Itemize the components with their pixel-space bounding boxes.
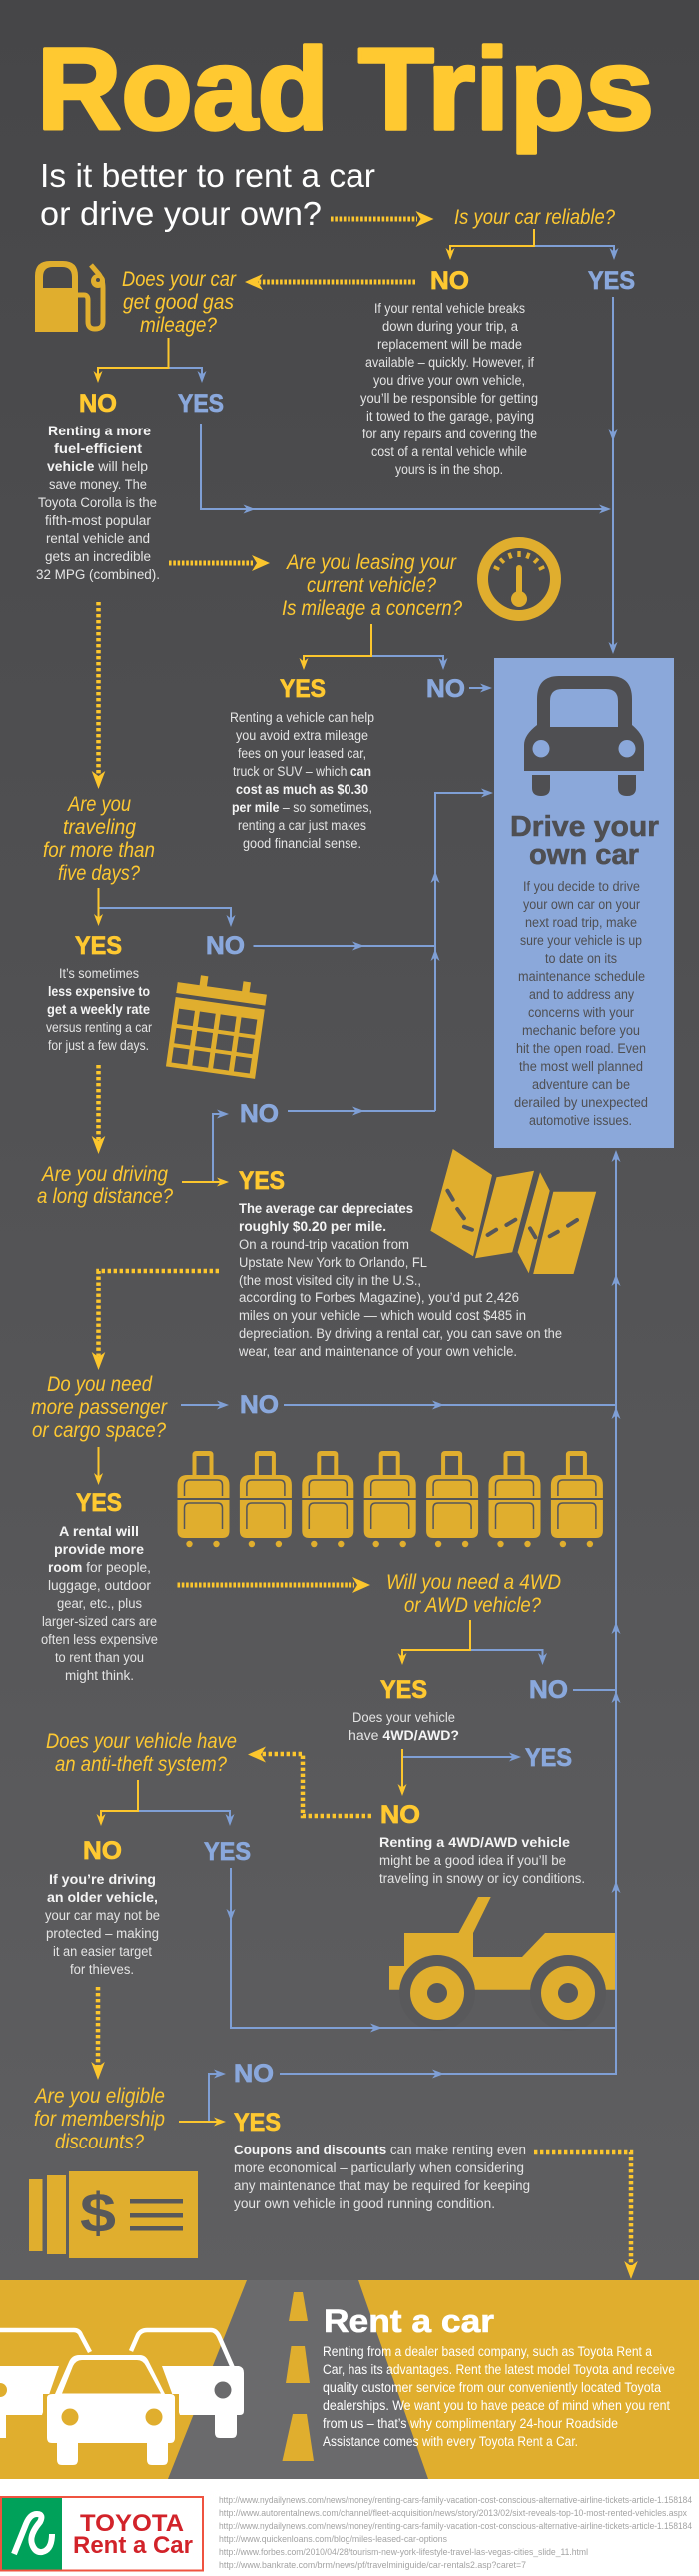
panel text [514,879,648,1128]
panel heading [510,811,659,871]
logo: toyota rent a car: Rent a Car [73,2532,193,2559]
icon: folded map [430,1149,596,1274]
branch: reliable yes / no [445,229,619,260]
text: does your vehicle have 4wd: have 4WD/AWD? [349,1728,459,1743]
label: no: NO [240,1100,279,1128]
text: renting 4wd [379,1835,585,1886]
text: rent a car: Renting from a dealer based company, such as Toyota Rent a [323,2344,652,2359]
title: Trips [358,24,654,154]
icon: gas pump [35,261,105,332]
logo: toyota rent a car [1,2497,203,2571]
panel text: your own car on your [523,897,640,912]
label: no: NO [380,1801,420,1829]
text: more room: might think. [65,1668,134,1683]
logo: toyota rent a car: TOYOTA [80,2510,184,2537]
icon: dollar bill: $ [80,2181,116,2244]
subtitle: Is it better to rent a car [40,157,375,194]
text: older vehicle: an older vehicle, [47,1890,158,1905]
text: rent a car: Assistance comes with every Toyota Rent a Car. [323,2434,578,2449]
arrow: to 4wd question [178,1577,370,1593]
panel: rent a car [0,2280,699,2479]
branch: five days [94,888,236,927]
text: coupons [234,2143,530,2211]
label: yes: YES [525,1744,572,1772]
question: good gas mileage [122,268,237,337]
text: depreciation: roughly $0.20 per mile. [239,1219,386,1234]
text: weekly rate: It’s sometimes [59,966,139,981]
arrow: dotted to rent a car [534,2152,638,2279]
text: depreciation: On a round-trip vacation from [239,1237,409,1252]
heading: rent a car: Rent a car [324,2303,494,2339]
question: five days [43,793,155,885]
text: rental breakdown: you drive your own vehicle, [373,373,525,388]
label: no: NO [529,1676,568,1704]
label: no: NO [426,675,465,703]
text: older vehicle: If you’re driving [49,1872,156,1887]
question: is your car reliable: Is your car reliable? [454,206,615,229]
panel text: next road trip, make [525,915,637,930]
question: good gas mileage: get good gas [123,291,234,314]
question: anti-theft: an anti-theft system? [55,1753,227,1776]
branch: leasing [300,624,447,670]
text: more room: gear, etc., plus [57,1596,142,1611]
panel text: automotive issues. [529,1113,632,1128]
label: no: NO [83,1837,122,1865]
text: depreciation: Upstate New York to Orlando, FL [239,1255,427,1270]
text: rental breakdown: cost of a rental vehicle while [371,444,527,459]
question: long distance: Are you driving [40,1163,168,1186]
text: older vehicle: protected – making [46,1926,159,1941]
text: mileage fees [230,710,374,851]
text: rental breakdown: available – quickly. However, if [365,355,534,370]
text: fuel efficient vehicle [36,424,160,582]
text: renting 4wd: might be a good idea if you’ll be [379,1853,566,1868]
text: weekly rate: less expensive to [48,984,150,999]
label: yes: YES [380,1676,427,1704]
question: membership: discounts? [55,2131,144,2153]
question: good gas mileage: Does your car [122,268,237,291]
label: no: NO [79,390,117,418]
text: coupons: more economical – particularly when considering [234,2160,524,2175]
panel text: and to address any [529,987,634,1002]
arrow: no to main line [280,2070,617,2078]
text: fuel efficient vehicle: fifth-most popular [45,513,152,528]
text: mileage fees: Renting a vehicle can help [230,710,374,725]
panel: drive your own car [494,658,674,1148]
text: weekly rate: versus renting a car [46,1020,152,1035]
question: good gas mileage: mileage? [140,314,217,337]
arrow: no to main line [284,1400,616,1410]
text: rental breakdown: If your rental vehicle breaks [374,301,525,316]
subtitle [40,157,375,232]
arrow: passenger yes [94,1447,103,1485]
text: renting 4wd: Renting a 4WD/AWD vehicle [379,1835,570,1850]
text: rental breakdown: you’ll be responsible for getting [360,391,538,406]
icon: three cars [0,2330,244,2465]
icon: jeep [389,1897,615,2031]
panel text: mechanic before you [522,1023,640,1038]
text: fuel efficient vehicle: vehicle will help [47,459,148,474]
arrow: no to connector [254,941,435,951]
text: does your vehicle have 4wd [349,1710,459,1743]
branch: membership [179,2070,226,2126]
text: older vehicle: your car may not be [45,1908,160,1923]
question: membership: Are you eligible [33,2085,165,2108]
label: yes: YES [178,390,224,418]
panel text: to date on its [545,951,617,966]
question: anti-theft: Does your vehicle have [46,1730,237,1753]
sources list: http://www.quickenloans.com/blog/miles-leased-car-options [219,2534,447,2544]
label: no: NO [206,932,245,960]
question: long distance [37,1163,173,1208]
branch: gas mileage [94,338,206,383]
arrow: no to gas question [245,274,415,290]
text: more room [41,1524,158,1683]
label: no: NO [240,1391,279,1419]
text: mileage fees: renting a car just makes [238,818,366,833]
question: passenger space: more passenger [31,1396,168,1419]
text: rental breakdown: for any repairs and covering the [362,427,537,441]
text: renting 4wd: traveling in snowy or icy conditions. [379,1871,585,1886]
panel text: sure your vehicle is up [520,933,642,948]
text: weekly rate [46,966,152,1053]
text: depreciation: according to Forbes Magazine), you’d put 2,426 [239,1290,519,1305]
label: yes: YES [280,675,326,703]
label: no: NO [234,2060,274,2088]
label: yes: YES [239,1167,285,1195]
label: no: NO [430,267,469,295]
question: long distance: a long distance? [37,1185,173,1208]
text: depreciation: miles on your vehicle — which would cost $485 in [239,1308,526,1323]
question: leasing: Are you leasing your [285,551,457,574]
panel heading: Drive your [510,811,659,843]
panel text: maintenance schedule [518,969,645,984]
label: yes: YES [204,1838,251,1866]
question: passenger space: Do you need [47,1373,153,1396]
text: more room: often less expensive [41,1632,158,1647]
text: more room: A rental will [59,1524,139,1539]
text: mileage fees: truck or SUV – which can [233,764,371,779]
text: coupons: Coupons and discounts can make renting even [234,2143,526,2157]
question: anti-theft [46,1730,237,1776]
question: membership: for membership [34,2108,165,2131]
arrow: passenger no [181,1400,229,1410]
text: fuel efficient vehicle: rental vehicle and [46,531,150,546]
subtitle: or drive your own? [40,195,322,232]
question: five days: traveling [63,816,136,839]
arrow: subtitle to first question [331,211,433,227]
text: rental breakdown [360,301,538,477]
text: more room: larger-sized cars are [42,1614,157,1629]
question: 4wd: Will you need a 4WD [386,1571,561,1594]
text: mileage fees: per mile – so sometimes, [232,800,372,815]
question: leasing: current vehicle? [307,574,436,597]
title: Road [37,24,329,154]
arrow: gas yes to main line [201,424,611,513]
branch: anti-theft [96,1780,234,1826]
text: coupons: any maintenance that may be required for keeping [234,2178,530,2193]
icon: car front [524,676,644,796]
arrow: dotted to passenger question [92,1271,219,1370]
text: rent a car [323,2344,675,2449]
arrow: dotted to membership question [91,1987,105,2080]
panel text: derailed by unexpected [514,1095,648,1110]
text: mileage fees: fees on your leased car, [238,746,366,761]
text: fuel efficient vehicle: gets an incredible [45,549,151,564]
sources list: http://www.bankrate.com/brm/news/pf/travelminiguide/car-rentals2.asp?caret=7 [219,2560,526,2570]
text: mileage fees: you avoid extra mileage [236,728,368,743]
arrow: leasing no to panel [469,683,492,693]
question: passenger space [31,1373,168,1442]
text: depreciation: depreciation. By driving a rental car, you can save on the [239,1326,562,1341]
panel text: If you decide to drive [523,879,640,894]
text: rental breakdown: it towed to the garage, paying [366,409,534,424]
text: fuel efficient vehicle: Renting a more [48,424,151,438]
text: rent a car: quality customer service from our conveniently located Toyota [323,2380,662,2395]
text: rent a car: from us – that’s why complimentary 24-hour Roadside [323,2416,618,2431]
text: mileage fees: cost as much as $0.30 [236,782,368,797]
arrow: connector up into panel [431,789,493,1111]
text: mileage fees: good financial sense. [243,836,361,851]
text: depreciation: wear, tear and maintenance of your own vehicle. [238,1344,517,1359]
text: depreciation: (the most visited city in the U.S., [239,1273,421,1288]
text: weekly rate: for just a few days. [48,1038,149,1053]
arrow: no to main line [573,1689,616,1691]
question: 4wd: or AWD vehicle? [404,1594,541,1617]
text: more room: provide more [54,1542,144,1557]
text: weekly rate: get a weekly rate [47,1002,150,1017]
icon: row of suitcases [178,1451,603,1547]
text: fuel efficient vehicle: 32 MPG (combined). [36,567,160,582]
label: yes: YES [588,267,635,295]
text: fuel efficient vehicle: fuel-efficient [54,441,143,456]
question: leasing [282,551,462,620]
text: depreciation: The average car depreciates [239,1201,413,1216]
branch: has 4wd [397,1749,521,1796]
text: older vehicle: it an easier target [53,1944,152,1959]
label: yes: YES [75,932,122,960]
arrow: anti-theft yes to main line [226,1868,616,2032]
question: five days: for more than [43,839,155,862]
text: older vehicle [45,1872,160,1977]
text: rental breakdown: yours is in the shop. [395,462,503,477]
icon: gauge [483,543,555,615]
question: passenger space: or cargo space? [32,1419,166,1442]
text: does your vehicle have 4wd: Does your vehicle [352,1710,455,1725]
question: membership [33,2085,165,2153]
question: five days: five days? [58,862,140,885]
panel text: hit the open road. Even [516,1041,646,1056]
text: older vehicle: for thieves. [70,1962,134,1977]
panel text: concerns with your [528,1005,635,1020]
sources list [219,2495,692,2570]
question: leasing: Is mileage a concern? [282,597,462,620]
text: more room: room for people, [48,1560,151,1575]
question: 4wd [386,1571,561,1617]
text: depreciation [238,1201,562,1359]
text: fuel efficient vehicle: Toyota Corolla is the [38,495,157,510]
arrow: yes down to drive your own car [609,297,617,654]
arrow: no to anti-theft [248,1746,371,1816]
title [37,24,654,154]
road [168,2280,428,2479]
panel heading: own car [529,839,639,871]
label: yes: YES [76,1489,122,1517]
branch: 4wd [397,1620,547,1665]
question: five days: Are you [66,793,131,816]
icon: calendar [166,972,268,1079]
panel text: the most well planned [519,1059,643,1074]
text: rental breakdown: down during your trip, a [382,319,519,334]
text: more room: to rent than you [55,1650,144,1665]
arrow: main line up into panel [611,1150,621,2074]
text: rent a car: dealerships. We want you to have peace of mind when you rent [323,2398,670,2413]
text: more room: luggage, outdoor [48,1578,152,1593]
sources list: http://www.forbes.com/2010/04/28/tourism-new-york-lifestyle-travel-las-vegas-cities_slide_11.html [219,2547,588,2557]
arrow: dotted down to long distance [92,1065,105,1154]
branch: long distance [182,1109,229,1187]
icon: dollar bill [29,2171,198,2258]
arrow: to leasing question [169,555,270,571]
label: yes: YES [234,2109,281,2137]
arrow: long dotted down to five days [92,602,105,789]
text: rental breakdown: replacement will be made [377,337,522,352]
text: fuel efficient vehicle: save money. The [49,477,147,492]
arrow: no to connector [288,1107,435,1115]
panel text: adventure can be [532,1077,630,1092]
text: coupons: your own vehicle in good running condition. [234,2196,495,2211]
